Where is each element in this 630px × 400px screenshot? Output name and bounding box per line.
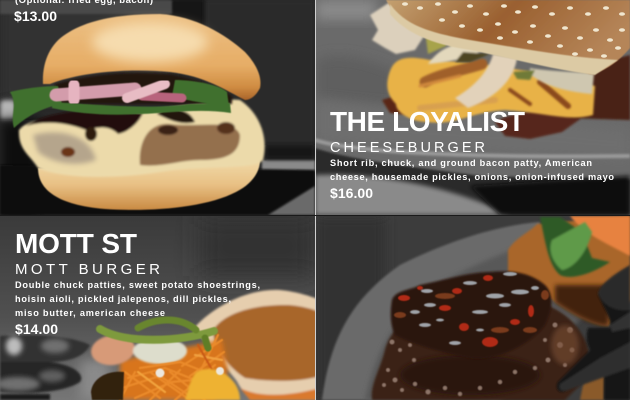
dark gap under bun	[55, 72, 232, 104]
shoestring fries	[120, 335, 224, 400]
photo background	[315, 0, 630, 215]
bun behind patty	[508, 216, 630, 326]
onions and pickles	[370, 2, 594, 108]
price: $13.00: $13.00	[14, 8, 57, 24]
bacon jam topping	[391, 271, 551, 359]
description: Double chuck patties, sweet potato shoestrings,	[15, 280, 260, 290]
black glove	[557, 265, 630, 400]
photo background	[0, 0, 315, 220]
bun slice	[195, 290, 320, 400]
panel: top-left burger	[0, 0, 315, 220]
price: $16.00: $16.00	[330, 185, 373, 201]
metal cups	[0, 335, 90, 400]
price: $14.00: $14.00	[15, 321, 58, 337]
patty texture	[382, 322, 579, 396]
panel: The Loyalist	[315, 0, 630, 215]
bun shadow	[555, 285, 612, 326]
description	[330, 158, 614, 182]
heading: Mott St: MOTT ST	[15, 228, 137, 259]
jalapeno slices	[100, 320, 214, 348]
bottom bun	[38, 160, 260, 210]
bacon strips	[420, 64, 568, 108]
photo background	[0, 215, 315, 400]
burger base colour	[120, 340, 228, 400]
subheading: Cheeseburger: CHEESEBURGER	[330, 140, 485, 156]
mayo dots	[156, 367, 224, 378]
panel: Mott St	[0, 215, 320, 400]
description: cheese, housemade pickles, onions, onion-infused mayo	[330, 172, 614, 182]
lettuce	[10, 80, 231, 128]
heading: The Loyalist: THE LOYALIST	[330, 106, 525, 137]
patty	[91, 372, 124, 400]
description	[15, 280, 260, 318]
description: Short rib, chuck, and ground bacon patty, American	[330, 158, 592, 168]
lettuce	[540, 217, 610, 277]
price: $13.00	[14, 0, 153, 24]
tomato	[570, 216, 630, 256]
description: miso butter, american cheese	[15, 308, 165, 318]
glaze and chili highlights	[394, 272, 549, 347]
description: hoisin aioli, pickled jalepenos, dill pickles,	[15, 294, 231, 304]
cheese and patty	[19, 100, 265, 177]
melted cheese	[185, 369, 240, 400]
bun lower left	[580, 370, 605, 400]
melted cheese	[387, 58, 595, 123]
pickle slices	[90, 336, 188, 366]
meat patty	[382, 55, 630, 139]
plate background	[315, 215, 630, 400]
bun highlight	[92, 22, 208, 62]
pickled onions	[56, 84, 182, 100]
top bun	[43, 14, 260, 100]
sesame bun	[386, 0, 630, 75]
subheading: Mott Burger: MOTT BURGER	[15, 261, 160, 278]
panel: bottom-right burger	[315, 215, 630, 400]
sesame seeds	[402, 2, 625, 58]
patty	[372, 295, 589, 400]
